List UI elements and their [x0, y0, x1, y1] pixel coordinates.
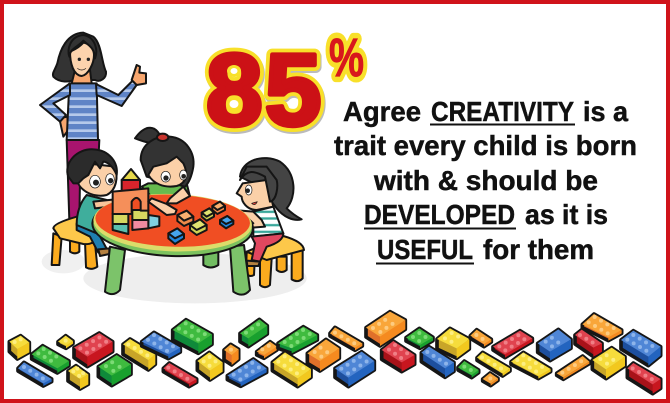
- brick red: [627, 363, 661, 394]
- floor shadow: [42, 250, 307, 303]
- brick blue flat: [18, 362, 52, 386]
- brick red: [575, 330, 602, 357]
- illustration: teacher and children at table: [40, 33, 307, 303]
- brick yellow long: [477, 352, 510, 376]
- 85 fill: 85: [206, 33, 323, 147]
- brick orange small: [224, 344, 239, 365]
- percent fill: %: [329, 28, 364, 88]
- 8 counters: [226, 65, 242, 111]
- percent outline: %: [329, 28, 364, 88]
- left stool: [52, 217, 97, 269]
- brick orange: [307, 339, 339, 371]
- brick orange tiny: [483, 373, 498, 386]
- brick yellow cube: [592, 348, 625, 379]
- brick green: [240, 319, 267, 347]
- brick red: [493, 331, 532, 358]
- statement text block: [334, 96, 637, 265]
- brick yellow cube: [197, 352, 223, 380]
- statement text block: trait every child is born: [334, 130, 637, 161]
- brick orange flat: [257, 342, 277, 358]
- right girl: [233, 158, 302, 266]
- statement text block: as it is: [525, 199, 608, 230]
- brick orange: [557, 356, 589, 379]
- statement text block: with & should be: [373, 165, 598, 196]
- big number 85 percent: [206, 28, 364, 149]
- brick blue: [335, 352, 374, 387]
- lego bricks left half: [9, 319, 339, 389]
- lego bricks right half: [330, 312, 661, 394]
- brick red: [382, 341, 415, 372]
- brick green big: [173, 320, 212, 353]
- brick green: [32, 346, 69, 373]
- statement text block: USEFUL: [377, 234, 473, 265]
- statement text block: DEVELOPED: [364, 199, 515, 230]
- brick green small: [458, 361, 479, 378]
- brick red flat: [163, 363, 197, 387]
- statement text block: for them: [483, 234, 594, 265]
- brick orange long: [330, 327, 362, 350]
- table: [91, 191, 254, 295]
- boy: [67, 149, 117, 256]
- brick green flat: [406, 328, 433, 348]
- brick red: [74, 333, 113, 367]
- brick blue: [227, 359, 267, 386]
- building block tower: [113, 169, 159, 234]
- brick green cube: [98, 355, 131, 386]
- girl hands on table: [148, 187, 190, 215]
- right stool: [246, 236, 304, 287]
- 85 outline: 85: [206, 33, 323, 147]
- brick orange small: [470, 330, 491, 347]
- 85 shadow: 85: [207, 35, 324, 149]
- brick yellow big: [272, 352, 311, 387]
- statement text block: is a: [583, 96, 628, 127]
- statement text block: Agree: [343, 96, 421, 127]
- brick blue cube: [538, 329, 571, 361]
- brick yellow: [9, 336, 29, 359]
- brick blue: [621, 331, 661, 366]
- brick green: [278, 327, 317, 353]
- brick orange top: [366, 312, 405, 346]
- brick blue: [142, 332, 180, 359]
- middle girl: [135, 128, 194, 208]
- statement text block: CREATIVITY: [431, 96, 574, 127]
- brick orange: [582, 314, 622, 341]
- loose table blocks: [168, 202, 233, 244]
- brick yellow: [437, 328, 469, 358]
- brick yellow: [511, 352, 551, 379]
- brick blue long: [421, 347, 454, 377]
- brick yellow cube: [68, 366, 88, 389]
- teacher: [40, 33, 146, 220]
- brick yellow small: [58, 336, 73, 348]
- brick yellow long: [123, 339, 155, 370]
